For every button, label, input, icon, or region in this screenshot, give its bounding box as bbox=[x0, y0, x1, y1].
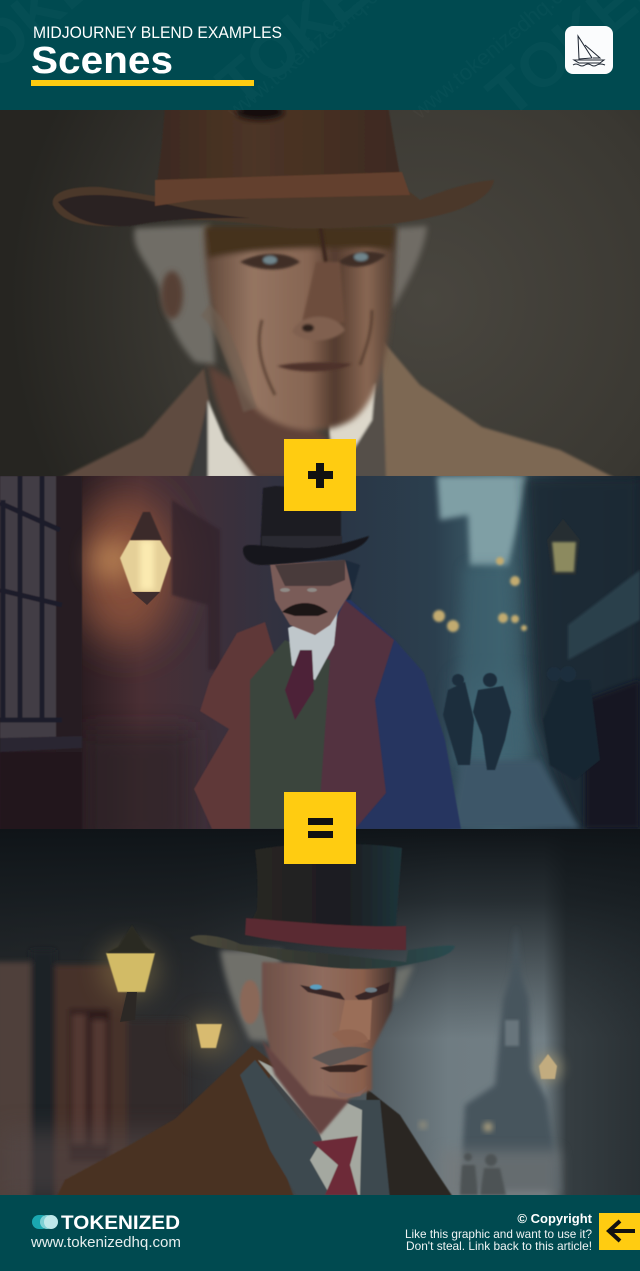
distant figures bbox=[443, 666, 600, 780]
left window bbox=[0, 476, 82, 832]
arrow button bbox=[599, 1213, 640, 1250]
brick buildings left bbox=[0, 960, 132, 1195]
face bbox=[204, 226, 396, 430]
ear bbox=[161, 271, 183, 319]
hair bbox=[220, 950, 282, 1042]
title: Scenes bbox=[31, 40, 173, 82]
facial features bbox=[300, 982, 390, 1098]
icon: Midjourney sailboat logo bbox=[565, 26, 613, 74]
ear bbox=[240, 980, 260, 1024]
website url: www.tokenizedhq.com bbox=[30, 1234, 181, 1251]
top hat bbox=[243, 486, 369, 565]
header panel bbox=[0, 0, 640, 131]
trench coat and shirt bbox=[61, 340, 615, 478]
image: weathered man in fedora and trench coat bbox=[0, 104, 640, 478]
hair bbox=[134, 225, 427, 365]
image: blended man in top hat in foggy street bbox=[0, 829, 640, 1202]
title underline bbox=[31, 80, 254, 86]
facial features bbox=[205, 225, 386, 410]
street lamp left bbox=[92, 512, 171, 605]
distant glow lights bbox=[483, 1122, 493, 1132]
hat bbox=[53, 104, 494, 228]
hair and face bbox=[270, 560, 360, 635]
arched window behind lamp bbox=[172, 500, 220, 670]
detective bbox=[194, 486, 461, 829]
hat bbox=[190, 844, 455, 969]
coat bbox=[55, 1046, 455, 1200]
right lamp bbox=[547, 519, 580, 575]
brand logo: TOKENIZED bbox=[61, 1213, 180, 1234]
operator: equals bbox=[284, 792, 356, 864]
operator: plus bbox=[284, 439, 356, 511]
eyebrow heading: MIDJOURNEY BLEND EXAMPLES bbox=[33, 24, 282, 42]
watermark bbox=[0, 0, 640, 131]
face bbox=[262, 962, 396, 1135]
cape bbox=[337, 600, 461, 829]
image: Victorian detective in foggy alley bbox=[0, 476, 640, 850]
copyright note bbox=[405, 1227, 592, 1253]
street lamps bbox=[100, 925, 562, 1082]
coat bbox=[194, 600, 394, 829]
man bbox=[55, 844, 455, 1200]
distant spire and town bbox=[460, 971, 554, 1190]
distant lamps bbox=[433, 557, 527, 632]
footer panel bbox=[0, 1195, 640, 1271]
copyright note: Like this graphic and want to use it? bbox=[405, 1227, 592, 1241]
brick wall glow bbox=[75, 495, 175, 645]
foggy alley bbox=[433, 476, 640, 829]
copyright heading: © Copyright bbox=[517, 1211, 593, 1226]
neck bbox=[208, 365, 330, 478]
copyright note: Don't steal. Link back to this article! bbox=[406, 1239, 592, 1253]
